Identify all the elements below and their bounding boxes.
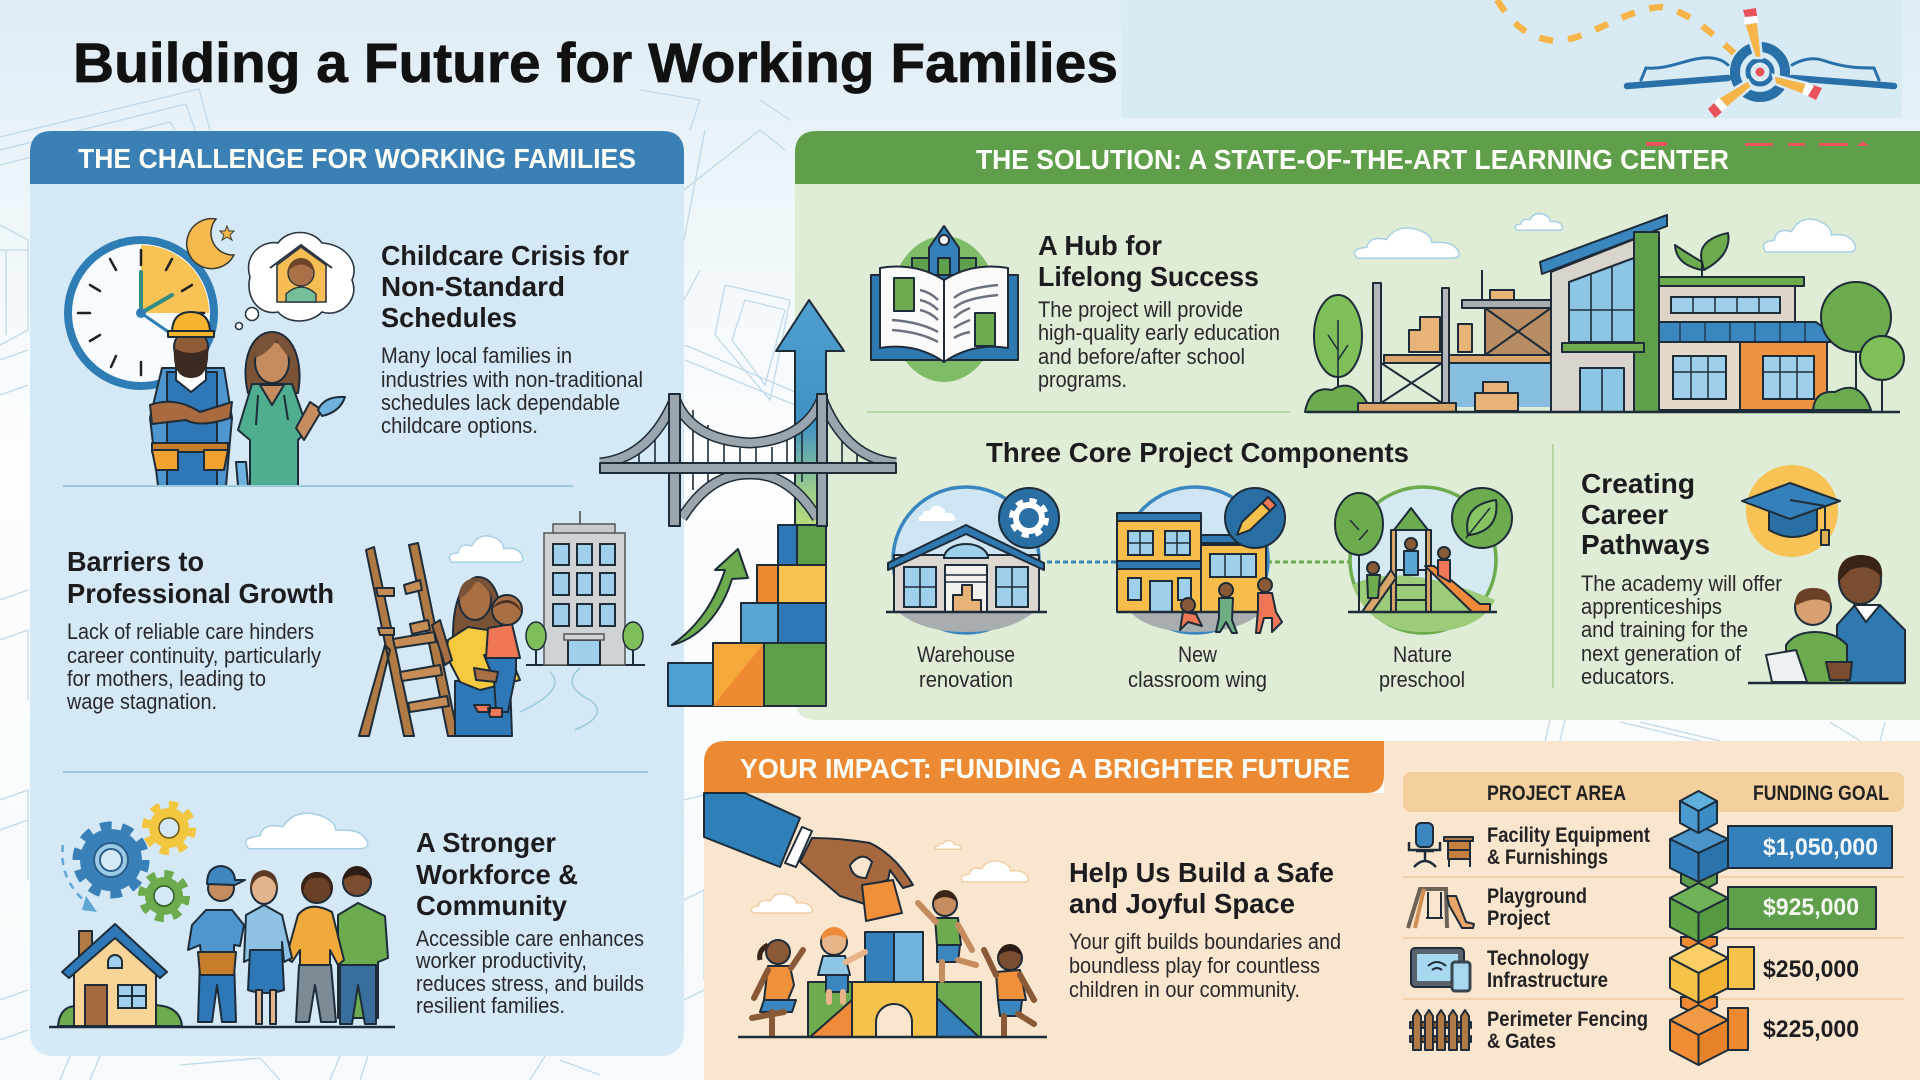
main tower xyxy=(1540,215,1667,412)
text: stronger workforce body: Accessible care enhances xyxy=(416,926,644,951)
panel header xyxy=(30,131,684,184)
bar: technology: $250,000 xyxy=(1763,956,1859,983)
illustration: suspension bridge xyxy=(600,394,896,526)
title: Building a Future for Working Families xyxy=(73,31,1118,94)
component: nature preschool xyxy=(1335,487,1512,633)
panel: the challenge for working families xyxy=(30,131,684,1056)
text: stronger workforce body xyxy=(415,926,644,1018)
text: childcare crisis body: industries with non-traditional xyxy=(381,367,643,392)
text: help us body: boundless play for countless xyxy=(1069,953,1320,978)
component: new classroom wing xyxy=(1117,487,1285,633)
bar: fencing xyxy=(1728,1008,1859,1050)
label: perimeter fencing: & Gates xyxy=(1487,1030,1556,1053)
label: playground project: Playground xyxy=(1487,885,1587,908)
icon: fence xyxy=(1410,1010,1471,1050)
bar: playground: $925,000 xyxy=(1763,894,1859,921)
heading: childcare crisis: Childcare Crisis for xyxy=(381,240,629,271)
icon: open book wings xyxy=(1627,58,1894,86)
panel header: THE CHALLENGE FOR WORKING FAMILIES xyxy=(78,143,636,174)
left tree xyxy=(1305,295,1372,412)
text: help us body: children in our community. xyxy=(1069,977,1300,1002)
text: stronger workforce body: resilient families. xyxy=(416,993,565,1018)
icon: leaf badge xyxy=(1452,488,1512,548)
illustration: learning center under construction xyxy=(1305,214,1904,412)
hand and sleeve xyxy=(704,793,913,921)
text: career pathways body: apprenticeships xyxy=(1581,594,1722,619)
heading: childcare crisis: Non-Standard xyxy=(381,271,565,302)
text: hub body: high-quality early education xyxy=(1038,320,1280,345)
heading: barriers xyxy=(67,546,334,609)
panel header xyxy=(704,741,1384,793)
text: barriers body: for mothers, leading to xyxy=(67,666,266,691)
icon: chair and desk xyxy=(1409,823,1473,867)
label: playground project: Project xyxy=(1487,907,1550,930)
table header: PROJECT AREA xyxy=(1487,782,1626,805)
arrow: green growth arrow xyxy=(672,549,748,645)
connector dashes xyxy=(1047,560,1350,564)
heading: help us build: and Joyful Space xyxy=(1069,888,1295,919)
right wing xyxy=(1659,233,1835,410)
label: nature preschool: preschool xyxy=(1379,667,1465,692)
arrow: rising blue arrow xyxy=(776,300,844,526)
text: career pathways body xyxy=(1581,571,1782,689)
cube stack xyxy=(1670,791,1728,1065)
label: warehouse renovation xyxy=(917,642,1015,692)
text: childcare crisis body: Many local families in xyxy=(381,343,572,368)
heading: childcare crisis xyxy=(381,240,629,333)
text: barriers body: career continuity, particularly xyxy=(67,643,321,668)
component: warehouse renovation xyxy=(886,487,1059,633)
text: career pathways body: and training for the xyxy=(1581,617,1748,642)
label: technology infrastructure: Infrastructure xyxy=(1487,969,1608,992)
heading: creating career pathways: Career xyxy=(1581,499,1668,530)
illustration: nurse xyxy=(236,332,345,486)
children running xyxy=(1180,578,1282,633)
label: technology infrastructure xyxy=(1487,947,1608,992)
icon: graduation cap xyxy=(1742,465,1840,557)
label: warehouse renovation: Warehouse xyxy=(917,642,1015,667)
text: career pathways body: educators. xyxy=(1581,664,1675,689)
heading: barriers: Professional Growth xyxy=(67,578,334,609)
bar: technology xyxy=(1728,947,1859,989)
divider: vertical xyxy=(1552,444,1554,688)
label: facility equipment: Facility Equipment xyxy=(1487,824,1650,847)
heading: a hub for lifelong success: Lifelong Success xyxy=(1038,261,1259,292)
heading: stronger workforce: Workforce & xyxy=(416,859,578,890)
heading: three core project components: Three Core Project Components xyxy=(986,437,1409,468)
label: technology infrastructure: Technology xyxy=(1487,947,1589,970)
icon: open book with school xyxy=(871,226,1018,382)
heading: help us build xyxy=(1069,857,1334,919)
building blocks xyxy=(808,932,981,1037)
text: stronger workforce body: reduces stress, and builds xyxy=(416,971,644,996)
panel header: YOUR IMPACT: FUNDING A BRIGHTER FUTURE xyxy=(740,753,1350,784)
heading: creating career pathways: Creating xyxy=(1581,468,1695,499)
illustration: construction worker xyxy=(150,312,232,486)
bar: playground xyxy=(1728,887,1876,929)
bar: facility equipment: $1,050,000 xyxy=(1763,834,1878,861)
heading: a hub for lifelong success: A Hub for xyxy=(1038,230,1162,261)
panel: your impact xyxy=(704,741,1920,1080)
text: childcare crisis body: schedules lack dependable xyxy=(381,390,620,415)
scaffolding xyxy=(1358,270,1551,412)
heading: stronger workforce: Community xyxy=(416,890,567,921)
text: childcare crisis body: childcare options. xyxy=(381,413,538,438)
illustration: mother and child xyxy=(432,577,522,736)
panel: the solution xyxy=(795,131,1920,720)
label: new classroom wing xyxy=(1128,642,1267,692)
divider xyxy=(63,485,573,487)
label: perimeter fencing xyxy=(1487,1008,1648,1053)
illustration: four community members xyxy=(49,866,395,1027)
heading: a hub for lifelong success xyxy=(1038,230,1259,292)
text: hub body: The project will provide xyxy=(1038,297,1243,322)
text: barriers body: Lack of reliable care hinders xyxy=(67,619,314,644)
text: help us body: Your gift builds boundaries and xyxy=(1069,929,1341,954)
table header: FUNDING GOAL xyxy=(1753,782,1889,805)
four children xyxy=(752,890,1034,1035)
bar: fencing: $225,000 xyxy=(1763,1016,1859,1043)
icon: swing and slide xyxy=(1408,889,1474,928)
text: career pathways body: The academy will offer xyxy=(1581,571,1782,596)
heading: barriers: Barriers to xyxy=(67,546,204,577)
label: warehouse renovation: renovation xyxy=(919,667,1013,692)
icon: clock xyxy=(68,240,214,386)
label: facility equipment: & Furnishings xyxy=(1487,846,1608,869)
illustration: mentor with apprentice xyxy=(1748,555,1905,683)
heading: creating career pathways xyxy=(1581,468,1710,560)
funding table xyxy=(1403,772,1904,1065)
ground line xyxy=(1307,411,1900,413)
label: playground project xyxy=(1487,885,1587,930)
right trees xyxy=(1813,282,1904,412)
label: new classroom wing: classroom wing xyxy=(1128,667,1267,692)
illustration: office building xyxy=(449,511,645,730)
illustration: stacked blocks xyxy=(668,525,826,706)
icon: propeller xyxy=(1708,8,1822,118)
divider xyxy=(63,771,648,773)
panel header xyxy=(795,131,1920,184)
text: childcare crisis body xyxy=(381,343,643,438)
text: hub body: programs. xyxy=(1038,367,1127,392)
illustration: house xyxy=(58,924,182,1026)
divider xyxy=(867,411,1290,413)
text: career pathways body: next generation of xyxy=(1581,641,1742,666)
text: hub body xyxy=(1038,297,1280,392)
heading: stronger workforce: A Stronger xyxy=(416,827,556,858)
icon: gear badge xyxy=(999,488,1059,548)
illustration: hand placing block with children xyxy=(704,793,1047,1037)
bar: facility equipment xyxy=(1728,826,1892,868)
table header xyxy=(1403,772,1904,812)
label: facility equipment xyxy=(1487,824,1650,869)
top-right emblem area xyxy=(1121,0,1902,118)
illustration: broken ladder xyxy=(359,543,458,736)
label: new classroom wing: New xyxy=(1178,642,1217,667)
text: barriers body xyxy=(66,619,321,714)
icon: thought bubble with child at home xyxy=(236,232,354,330)
text: help us body xyxy=(1069,929,1341,1002)
panel header: THE SOLUTION: A STATE-OF-THE-ART LEARNING CENTER xyxy=(976,144,1729,175)
text: hub body: and before/after school xyxy=(1038,344,1245,369)
heading: childcare crisis: Schedules xyxy=(381,302,517,333)
text: barriers body: wage stagnation. xyxy=(66,689,217,714)
heading: creating career pathways: Pathways xyxy=(1581,529,1710,560)
heading: help us build: Help Us Build a Safe xyxy=(1069,857,1334,888)
illustration: gears xyxy=(62,805,368,918)
label: nature preschool: Nature xyxy=(1393,642,1452,667)
icon: pencil badge xyxy=(1225,488,1285,548)
heading: stronger workforce xyxy=(416,827,578,921)
label: perimeter fencing: Perimeter Fencing xyxy=(1487,1008,1648,1031)
dashed flight path xyxy=(1497,0,1734,53)
text: stronger workforce body: worker productivity, xyxy=(415,948,587,973)
label: nature preschool xyxy=(1379,642,1465,692)
bar chart: funding goals xyxy=(1670,791,1892,1065)
icon: moon and star xyxy=(187,219,234,269)
icon: tablet and phone xyxy=(1411,948,1470,991)
